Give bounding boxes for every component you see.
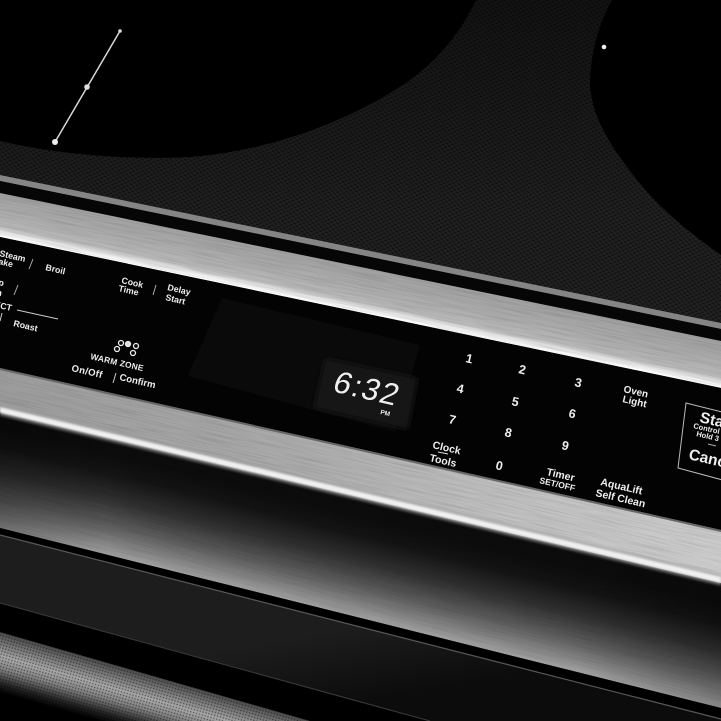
clock display [314,358,418,430]
control labels: Broil [45,262,66,276]
control labels: Delay [167,282,192,297]
cooktop glass surface [0,0,721,345]
control labels: Light [621,394,648,411]
keypad numbers: 0 [494,458,504,473]
control labels: Tools [428,452,458,470]
lower steel trim [0,368,721,583]
keypad numbers: 3 [573,375,583,390]
black control panel [0,237,721,532]
control labels: AquaLift [599,476,644,498]
keypad numbers: 9 [560,438,570,453]
right burner zone [590,0,721,255]
keypad numbers: 4 [455,381,465,396]
right burner dot [602,45,606,49]
warm zone icon [114,340,138,356]
lower steel highlight [0,405,721,586]
start / cancel button: Hold 3 [696,429,720,443]
start / cancel button: Control [693,421,721,436]
crease [0,528,721,721]
clock display: PM [380,409,391,418]
control labels: Oven [622,384,649,401]
burner marker line [52,29,122,145]
control labels: Time [118,283,140,298]
control labels: Cook [121,275,144,290]
control labels: Start [165,292,186,306]
keypad numbers: 7 [447,412,457,427]
control labels: Confirm [118,372,157,391]
keypad numbers: 1 [464,351,474,366]
display window [188,298,420,432]
control labels: Roast [13,318,39,333]
left burner zone [0,0,476,158]
lower dark steel door [0,420,721,721]
keypad numbers: 6 [567,406,577,421]
upper steel trim [0,175,721,388]
keypad numbers [447,351,583,473]
control labels: On/Off [70,363,104,381]
control labels: Self Clean [594,487,647,510]
control labels: SET/OFF [539,475,576,493]
keypad numbers: 2 [517,362,527,377]
keypad numbers: 8 [503,425,513,440]
door handle [0,632,310,721]
control labels: WARM ZONE [90,351,145,373]
keypad numbers: 5 [510,394,520,409]
control labels [0,248,649,510]
clock display: 6:32 [328,365,406,412]
control labels: Clock [431,439,462,457]
control labels: Timer [545,466,576,484]
start / cancel button [678,403,721,482]
